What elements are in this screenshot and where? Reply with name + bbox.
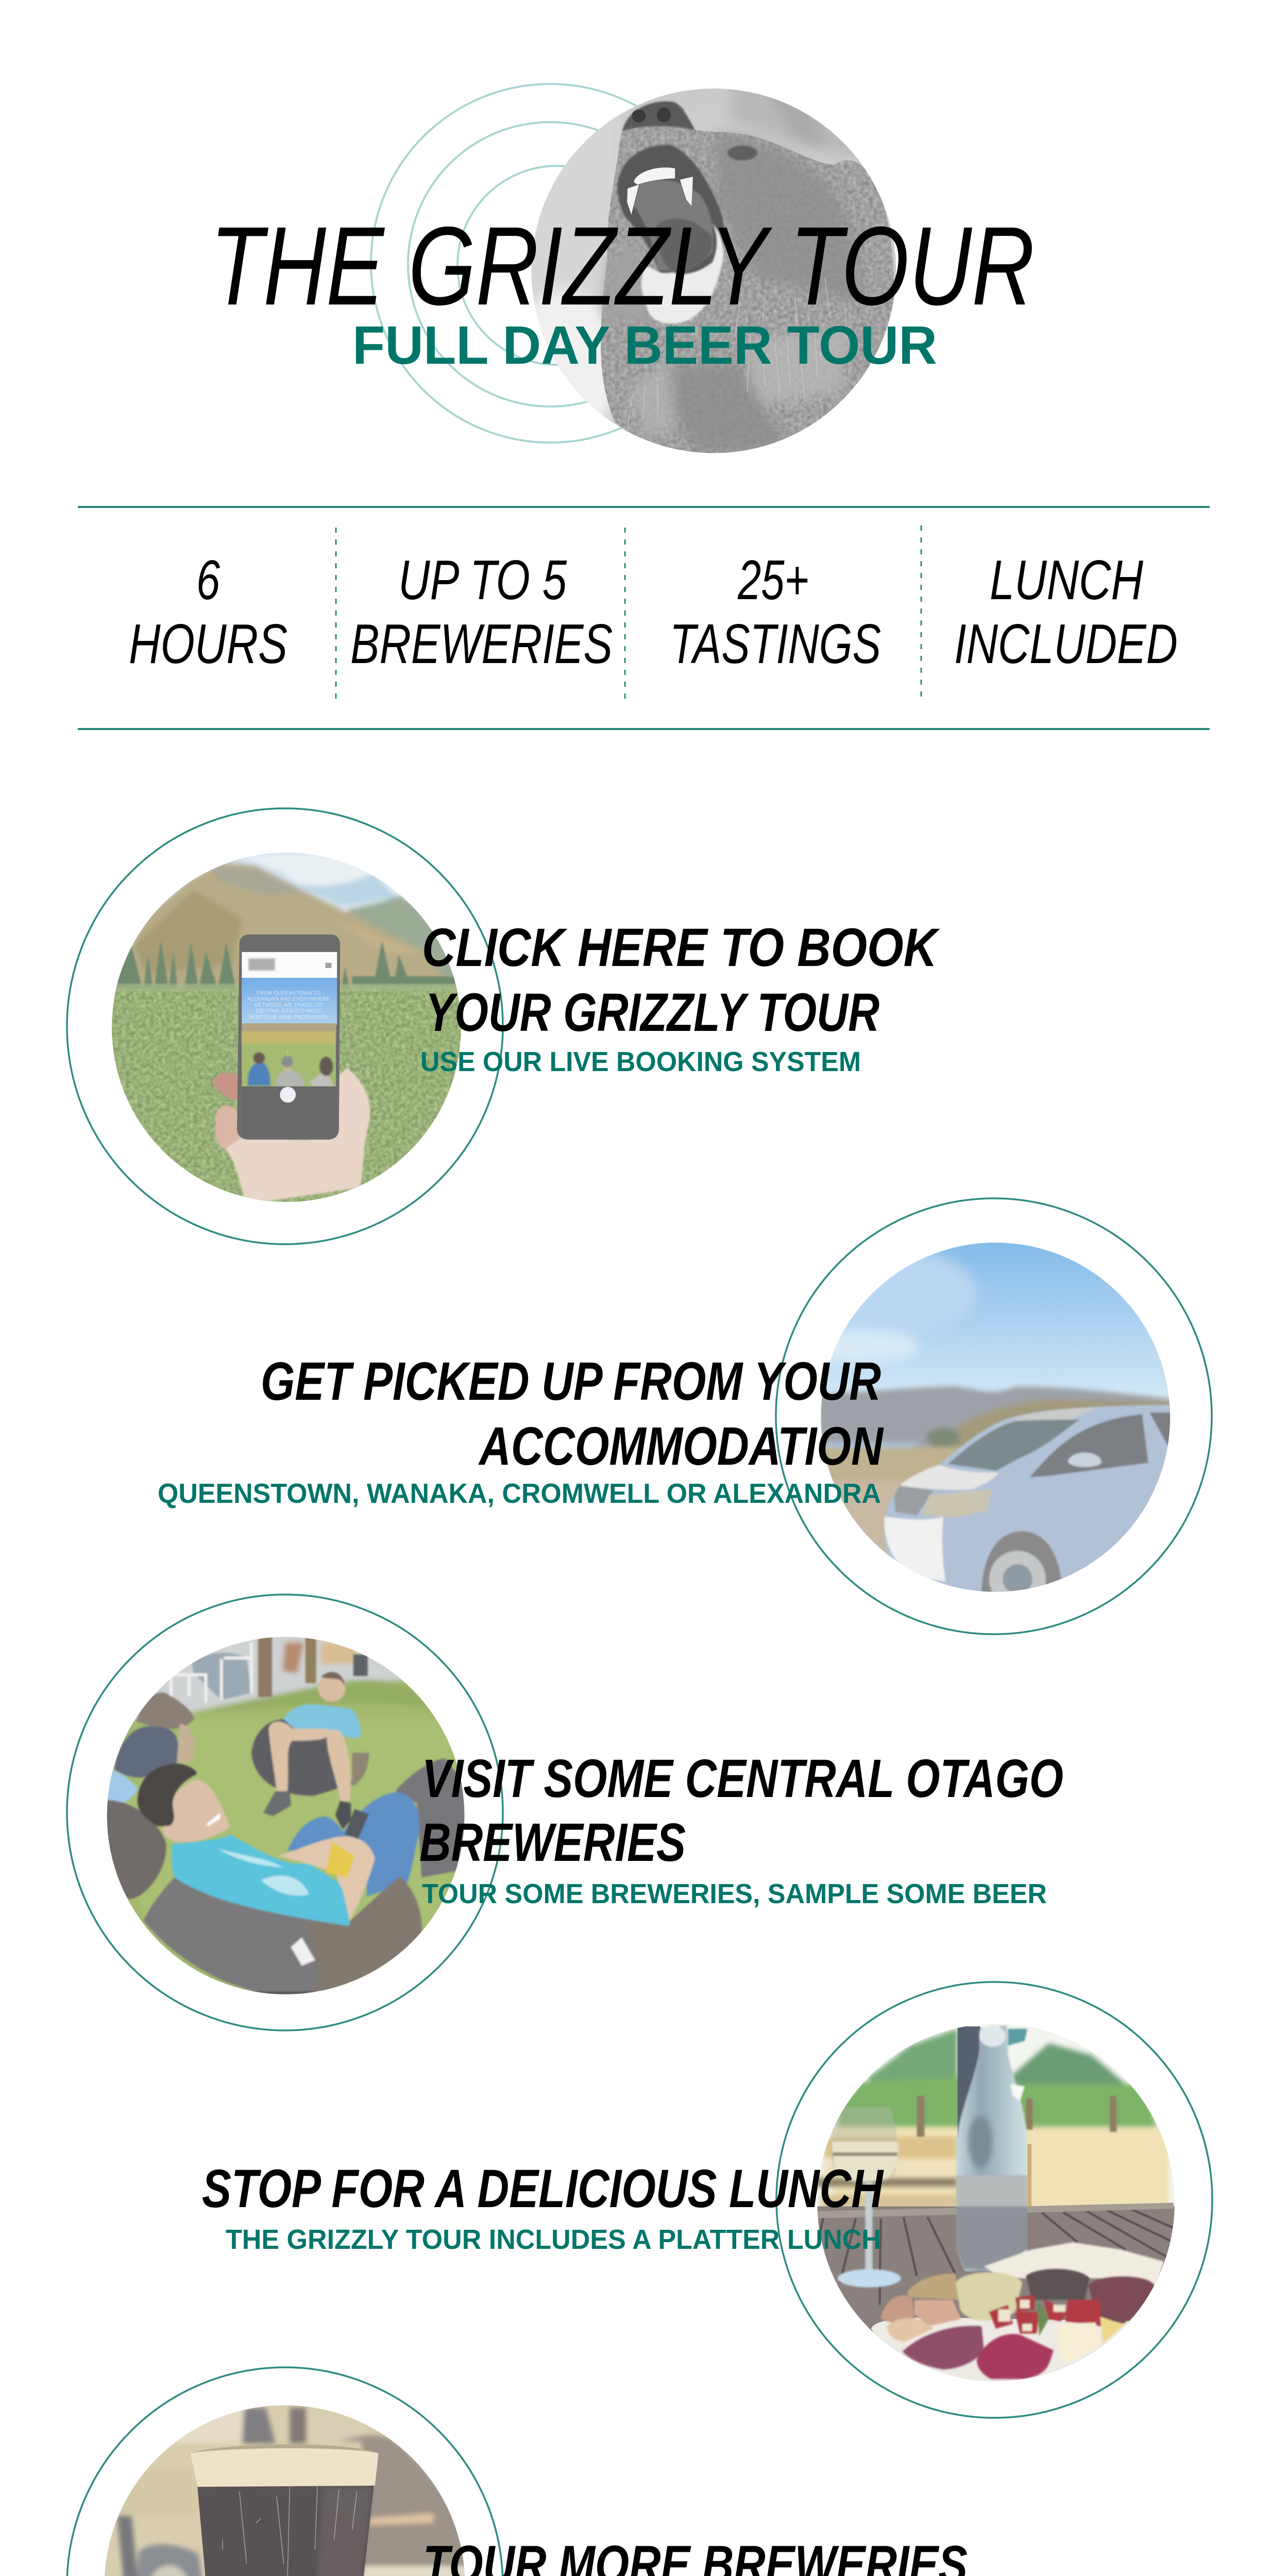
stat: up to 5 breweries: UP TO 5 — [398, 549, 567, 612]
fur strands — [628, 277, 848, 427]
bumper — [884, 1517, 945, 1582]
heading: GET PICKED UP FROM YOUR — [261, 1351, 881, 1412]
heading — [261, 1351, 884, 1477]
grille / headlight — [894, 1485, 934, 1516]
people on screen — [248, 1052, 334, 1087]
stat: 6 hours: HOURS — [129, 613, 287, 675]
stat: lunch included: LUNCH — [990, 549, 1143, 612]
phone screen text — [247, 990, 330, 1020]
photo: pint of stout — [98, 2396, 482, 2576]
step 1: book — [67, 808, 940, 1244]
stat: up to 5 breweries — [350, 549, 613, 675]
heading: VISIT SOME CENTRAL OTAGO — [422, 1749, 1063, 1809]
head — [163, 1780, 230, 1842]
friend left — [136, 1692, 194, 1729]
meats — [881, 2295, 914, 2324]
subtitle: FULL DAY BEER TOUR — [352, 315, 937, 376]
outer ring — [67, 1595, 503, 2030]
nose — [622, 101, 695, 131]
outer ring — [67, 808, 503, 1244]
title: THE GRIZZLY TOUR — [210, 204, 1035, 328]
bread — [907, 2242, 1164, 2300]
phone screen text: BOUTIQUE WINE PRODUCERS — [249, 1014, 328, 1020]
phone screen text: ALEXANDRA AND EVERYWHERE — [247, 996, 330, 1002]
peppers — [989, 2295, 1101, 2333]
heading: BREWERIES — [419, 1812, 686, 1873]
van body — [885, 1404, 1185, 1607]
outer ring — [67, 2367, 503, 2576]
cheese — [1057, 2323, 1100, 2365]
wine glass — [831, 2107, 901, 2287]
stat: lunch included — [954, 549, 1178, 675]
phone screen text: CENTRAL OTAGO'S MOST — [256, 1008, 322, 1014]
step 2: pick up — [158, 1198, 1212, 1634]
stat: 25+ tastings: 25+ — [737, 549, 809, 612]
wheel — [981, 1531, 1063, 1607]
heading: STOP FOR A DELICIOUS LUNCH — [202, 2159, 884, 2219]
lower jaw — [641, 224, 723, 324]
heading — [422, 918, 940, 1043]
main guy jeans — [287, 1792, 419, 1896]
stat: 6 hours — [129, 549, 287, 675]
step 3: breweries — [67, 1595, 1063, 2030]
subheading: QUEENSTOWN, WANAKA, CROMWELL OR ALEXANDRA — [158, 1478, 881, 1509]
subheading: TOUR SOME BREWERIES, SAMPLE SOME BEER — [422, 1878, 1047, 1909]
photo: wine, bottle and platter — [809, 2014, 1193, 2391]
header — [210, 77, 1035, 477]
subheading: THE GRIZZLY TOUR INCLUDES A PLATTER LUNCH — [226, 2224, 881, 2255]
plate — [871, 2317, 1157, 2381]
photo: friends on bean bags — [98, 1628, 482, 2012]
side window — [1029, 1414, 1148, 1477]
heading — [419, 1749, 1063, 1873]
stat: up to 5 breweries: BREWERIES — [350, 613, 613, 675]
heading: YOUR GRIZZLY TOUR — [426, 982, 879, 1043]
phone screen text: BETWEEN, WE TRAVEL TO — [255, 1003, 323, 1008]
photo: grizzly bear roaring — [532, 89, 896, 453]
pint — [190, 2445, 379, 2576]
concentric arcs — [371, 84, 730, 443]
phone screen logo — [248, 958, 275, 971]
step 5: more breweries — [67, 2367, 1223, 2576]
head of beer — [190, 2444, 379, 2487]
main bean bag — [143, 1876, 422, 1995]
stat: 6 hours: 6 — [196, 549, 220, 612]
stats band — [78, 507, 1210, 729]
windshield — [948, 1419, 1080, 1471]
stat: 25+ tastings: TASTINGS — [670, 613, 881, 675]
stat: lunch included: INCLUDED — [954, 613, 1178, 675]
phone screen text: FROM QUEENSTOWN TO — [257, 990, 320, 996]
heading: ACCOMMODATION — [478, 1416, 884, 1477]
outer ring — [776, 1982, 1212, 2418]
photo: van with mountains — [794, 1231, 1193, 1607]
hood — [900, 1465, 998, 1489]
teeth — [634, 167, 675, 184]
bottle — [956, 2025, 1027, 2271]
table — [809, 2206, 1185, 2391]
phone — [237, 935, 340, 1140]
eye — [727, 145, 757, 160]
step 4: lunch — [202, 1982, 1212, 2418]
friend back — [251, 1719, 352, 1796]
glass scratches — [223, 2487, 357, 2576]
shirt — [172, 1834, 350, 1925]
heading: CLICK HERE TO BOOK — [422, 918, 940, 978]
hand — [213, 1067, 370, 1205]
mouth — [617, 145, 724, 276]
jars — [956, 2272, 1022, 2320]
right dark bag — [395, 1759, 474, 1877]
subheading: USE OUR LIVE BOOKING SYSTEM — [420, 1046, 861, 1077]
arm — [278, 1836, 375, 1921]
photo: phone held over vineyard — [112, 853, 461, 1202]
outer ring — [776, 1198, 1212, 1634]
stat: 25+ tastings — [670, 549, 881, 675]
